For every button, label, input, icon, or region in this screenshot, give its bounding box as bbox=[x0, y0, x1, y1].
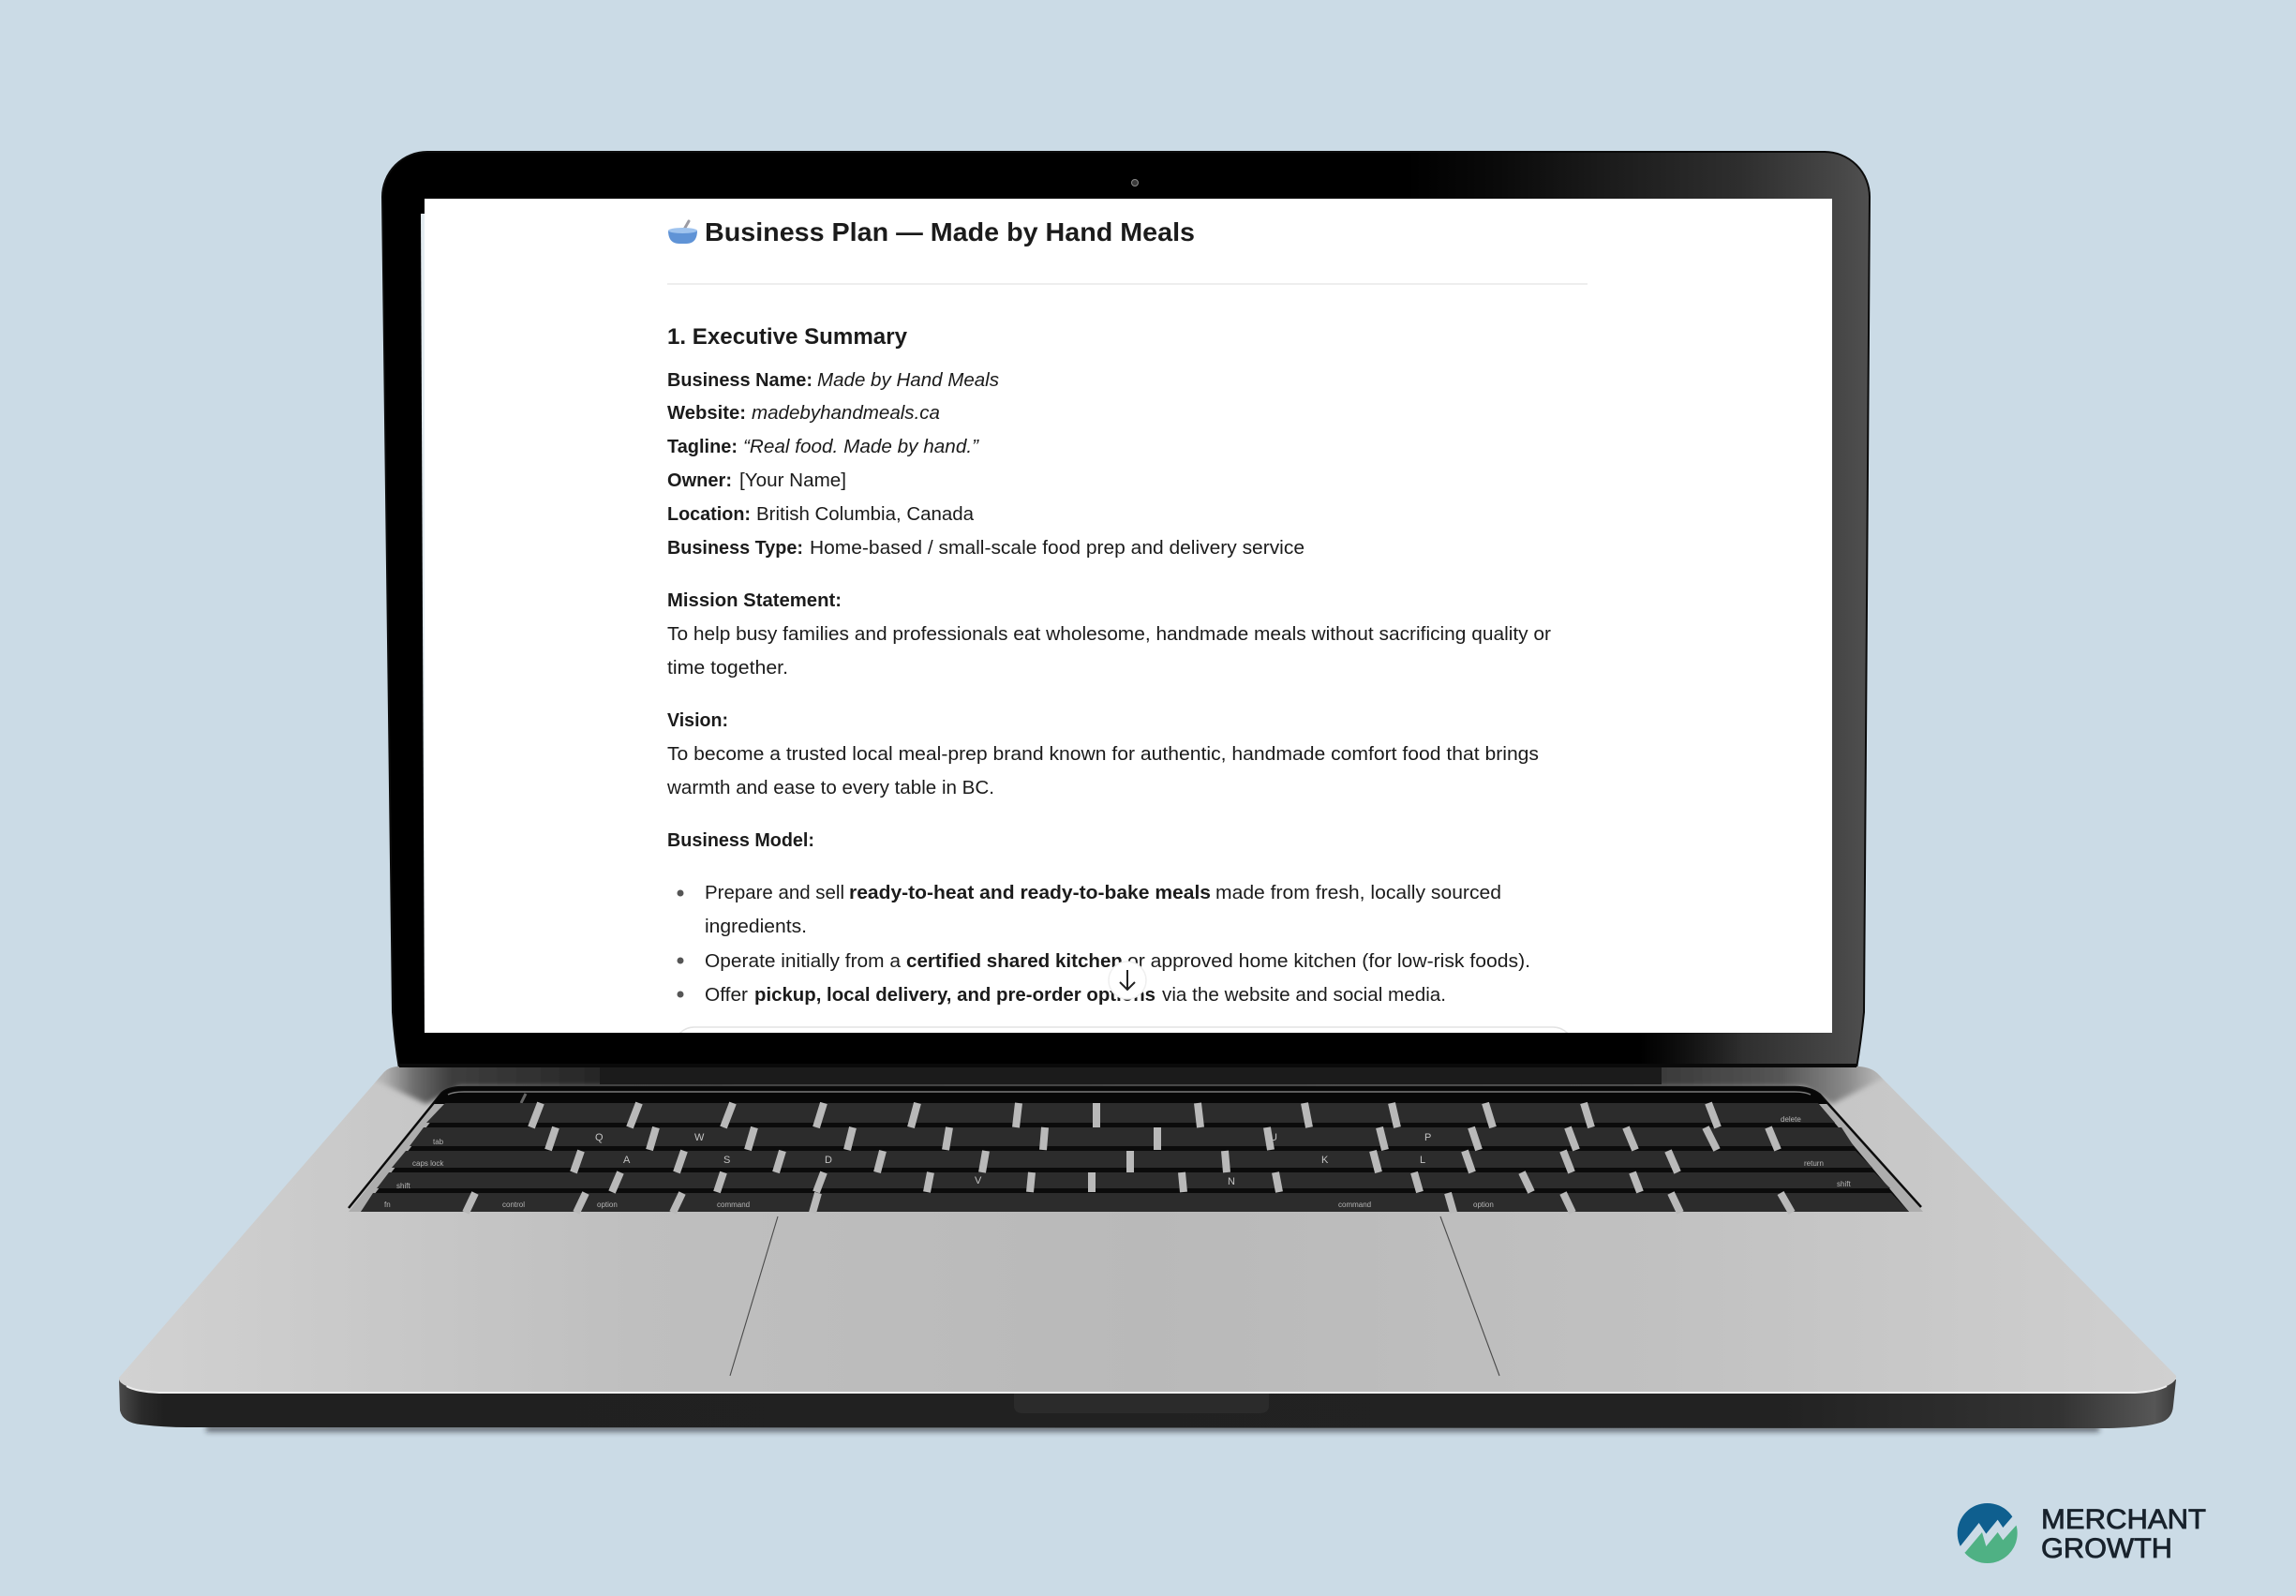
business details list: madebyhandmeals.ca bbox=[752, 403, 940, 424]
screen edge strip bbox=[421, 214, 425, 1033]
mission statement: To help busy families and professionals eat wholesome, handmade meals without sacrificing quality or bbox=[667, 624, 1551, 645]
key legends: tab bbox=[433, 1138, 444, 1146]
key legends: Q bbox=[595, 1132, 604, 1143]
icon: logo mark bbox=[1957, 1503, 2018, 1563]
keyboard well bbox=[349, 1087, 1923, 1212]
key legends: N bbox=[1228, 1176, 1235, 1187]
key legends: shift bbox=[1837, 1180, 1851, 1188]
key legends: control bbox=[502, 1201, 525, 1209]
laptop screen bbox=[425, 199, 1832, 1083]
business details list bbox=[667, 370, 1305, 559]
key legends: L bbox=[1420, 1155, 1425, 1166]
bullet list: ingredients. bbox=[705, 917, 807, 937]
mission statement bbox=[667, 590, 1551, 679]
key legends: P bbox=[1424, 1132, 1431, 1143]
key legends: delete bbox=[1781, 1115, 1801, 1124]
laptop lid bbox=[382, 152, 1870, 1068]
bullet list bbox=[677, 883, 1530, 1006]
vision: To become a trusted local meal-prep brand known for authentic, handmade comfort food that brings bbox=[667, 744, 1539, 765]
logo: Merchant Growth bbox=[1957, 1503, 2206, 1563]
keyboard bbox=[349, 1087, 1923, 1213]
key legends: option bbox=[597, 1201, 618, 1209]
bullet list: ready-to-heat and ready-to-bake meals bbox=[849, 883, 1211, 903]
section heading: executive summary: 1. Executive Summary bbox=[667, 324, 908, 350]
bullet list: Prepare and sell bbox=[705, 883, 844, 903]
key legends bbox=[384, 1115, 1851, 1209]
divider bbox=[667, 283, 1588, 285]
front notch bbox=[1014, 1392, 1269, 1413]
key gaps bbox=[466, 1103, 1792, 1213]
business details list: Tagline: bbox=[667, 437, 738, 457]
bullet list: certified shared kitchen bbox=[906, 951, 1123, 972]
bullet list: made from fresh, locally sourced bbox=[1215, 883, 1501, 903]
key legends: fn bbox=[384, 1201, 391, 1209]
business details list: Business Name: bbox=[667, 370, 813, 391]
business details list: Website: bbox=[667, 403, 746, 424]
laptop base bbox=[119, 1059, 2176, 1432]
trackpad edges bbox=[730, 1216, 1499, 1376]
vision bbox=[666, 710, 1539, 798]
top band highlight bbox=[448, 1092, 1811, 1095]
icon: bowl bbox=[668, 221, 697, 244]
shadow under front edge bbox=[206, 1425, 2099, 1432]
bullet list: pickup, local delivery, and pre-order options bbox=[754, 985, 1155, 1006]
mission statement: time together. bbox=[667, 658, 788, 679]
business details list: “Real food. Made by hand.” bbox=[743, 437, 979, 457]
document title with bowl icon: Business Plan — Made by Hand Meals bbox=[705, 217, 1195, 246]
business details list: British Columbia, Canada bbox=[756, 504, 975, 525]
business model bbox=[667, 830, 1530, 1006]
key legends: S bbox=[723, 1155, 730, 1166]
camera bbox=[1132, 180, 1138, 186]
bullet list: via the website and social media. bbox=[1162, 985, 1446, 1006]
chat input box outline bbox=[679, 1026, 1568, 1033]
key legends: return bbox=[1804, 1159, 1824, 1168]
bullet list: Operate initially from a bbox=[705, 951, 902, 972]
bullet list: or approved home kitchen (for low-risk foods). bbox=[1127, 951, 1530, 972]
logo: Merchant Growth: GROWTH bbox=[2041, 1533, 2172, 1564]
key legends: A bbox=[623, 1155, 631, 1166]
key legends: command bbox=[717, 1201, 750, 1209]
vision: warmth and ease to every table in BC. bbox=[666, 778, 994, 798]
well outline bbox=[349, 1087, 1921, 1208]
rear band bbox=[377, 1066, 1882, 1107]
front edge bbox=[119, 1380, 2176, 1428]
key rows bbox=[361, 1103, 1909, 1212]
vision: Vision: bbox=[667, 710, 728, 731]
business details list: Business Type: bbox=[667, 538, 803, 559]
key legends: W bbox=[694, 1132, 705, 1143]
lid bottom shadow bbox=[399, 1064, 1856, 1067]
key legends: U bbox=[1270, 1132, 1277, 1143]
business details list: Owner: bbox=[667, 470, 732, 491]
top black band bbox=[433, 1087, 1827, 1104]
key legends: D bbox=[825, 1155, 832, 1166]
key legends: caps lock bbox=[412, 1159, 444, 1168]
lid lower strip fade bbox=[1640, 1033, 1743, 1068]
function row notch bbox=[521, 1094, 526, 1103]
key legends: K bbox=[1321, 1155, 1329, 1166]
hinge bbox=[600, 1066, 1662, 1084]
silver deck bbox=[119, 1066, 2176, 1393]
business model: Business Model: bbox=[667, 830, 814, 851]
business details list: Made by Hand Meals bbox=[817, 370, 999, 391]
key legends: V bbox=[975, 1175, 982, 1186]
key legends: option bbox=[1473, 1201, 1494, 1209]
key legends: command bbox=[1338, 1201, 1371, 1209]
business details list: [Your Name] bbox=[739, 470, 846, 491]
scroll down button bbox=[1109, 962, 1146, 999]
bullet list: Offer bbox=[705, 985, 748, 1006]
business details list: Location: bbox=[667, 504, 751, 525]
deck front highlight bbox=[127, 1386, 2167, 1393]
mission statement: Mission Statement: bbox=[667, 590, 842, 611]
logo: Merchant Growth: MERCHANT bbox=[2041, 1504, 2206, 1535]
key legends: shift bbox=[396, 1182, 410, 1190]
lid lower black strip bbox=[399, 1033, 1640, 1068]
business details list: Home-based / small-scale food prep and delivery service bbox=[810, 538, 1305, 559]
key backdrop bbox=[361, 1103, 1909, 1212]
